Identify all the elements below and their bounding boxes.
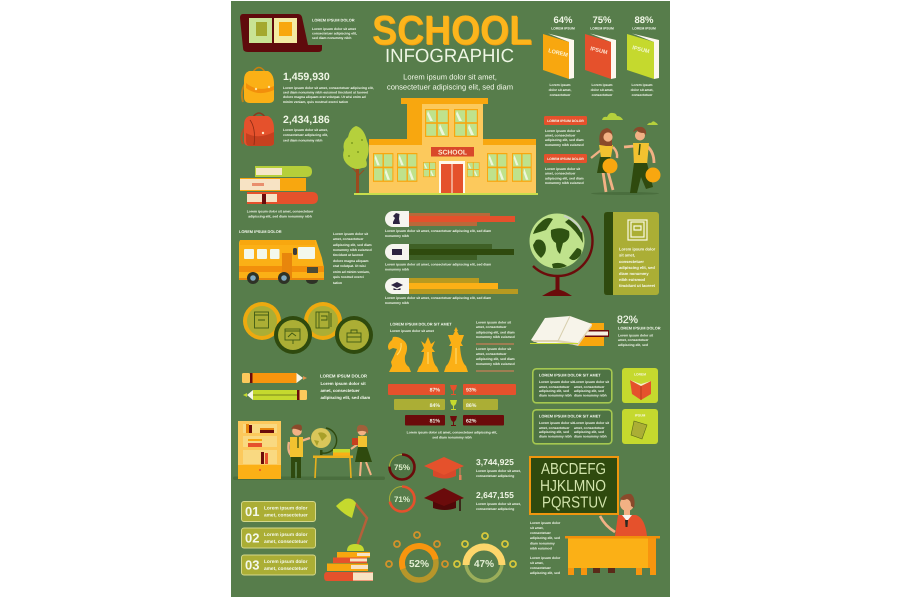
icon: orange graduation cap	[424, 457, 464, 480]
text: chess notes: nonummy nibh euismod	[476, 362, 515, 366]
chart: 71% donut: 71%	[394, 495, 410, 504]
text: teacher notes: consectetuer	[530, 566, 552, 570]
icon: orange backpack	[242, 68, 274, 103]
text: teacher notes: diam nonummy	[530, 542, 555, 546]
list: numbered items	[242, 502, 316, 575]
list item 02: amet, consectetuer	[264, 539, 308, 545]
chart: 47% donut	[454, 533, 516, 581]
title: SCHOOL	[373, 8, 533, 54]
icon: stack of books	[240, 166, 318, 204]
panel: info box one: amet, consectetuer	[539, 385, 570, 389]
text: teacher notes: consectetuer	[530, 531, 552, 535]
callout: red labels and text: LOREM IPSUM DOLOR	[547, 119, 584, 123]
icon: pencils	[242, 373, 307, 400]
list item 01: 01	[245, 504, 259, 519]
text: teacher notes: nibh euismod	[530, 546, 552, 550]
subtitle: Lorem ipsum dolor sit amet,	[403, 72, 497, 82]
subtitle: consectetuer adipiscing elit, sed diam	[387, 82, 513, 92]
stat: 88% book: 88%	[634, 15, 654, 26]
chart: 71% donut	[390, 486, 414, 512]
text: bus description: Lorem ipsum dolor sit	[333, 232, 369, 236]
stat: 88% book: consectetuer	[632, 93, 653, 97]
bar row: graduation cap: Lorem ipsum dolor sit amet, consectetuer adipiscing elit, sed diam	[385, 296, 491, 300]
stat: 2,434,186: Lorem ipsum dolor sit amet,	[283, 128, 328, 132]
text: bus description: dolore magna aliquam	[333, 259, 369, 263]
text: bus description: tation	[333, 281, 342, 285]
table with books	[313, 449, 353, 478]
text: teacher notes: adipiscing elit, sed	[530, 571, 560, 575]
text: teacher notes: Lorem ipsum dolor	[530, 556, 561, 560]
text: teacher notes: adipiscing elit, sed	[530, 536, 560, 540]
text: pencils caption: LOREM IPSUM DOLOR	[320, 374, 368, 378]
list item 03: 03	[245, 558, 259, 572]
icon: dark graduation cap	[424, 488, 464, 511]
list item 03	[242, 555, 316, 575]
text: chess notes	[476, 320, 515, 372]
stat: 1,459,930: 1,459,930	[283, 71, 330, 83]
chart: trophy comparison bars: Lorem ipsum dolor sit amet, consectetuer adipiscing elit,	[407, 430, 497, 434]
panel: info box one: diam nonummy nibh	[574, 394, 607, 398]
stat: 82%: amet, consectetuer	[618, 338, 649, 342]
stat: 75% book: Lorem ipsum	[592, 83, 613, 87]
bar row: knight	[385, 211, 515, 238]
text: chess notes: Lorem ipsum dolor sit	[476, 320, 512, 324]
list item 01: amet, consectetuer	[264, 512, 308, 518]
card: lorem with red book: LOREM	[634, 372, 646, 376]
panel: info box one: adipiscing elit, sed	[539, 389, 569, 393]
callout: red labels and text: LOREM IPSUM DOLOR	[547, 157, 584, 161]
stat: 75% book: consectetuer	[592, 93, 613, 97]
stat: 75% book: IPSUM	[590, 46, 608, 56]
stat: 75% book: 75%	[592, 15, 612, 26]
title: SCHOOL	[372, 7, 532, 53]
bar row: book	[385, 244, 514, 272]
callout: red labels and text: amet, consectetuer	[545, 134, 576, 138]
illustration: blackboard: ABCDEFG	[541, 461, 606, 478]
icons: circle badges	[243, 302, 373, 354]
bar row: knight: nonummy nibh	[385, 234, 409, 238]
chart: trophy comparison bars: 86%	[466, 403, 477, 409]
bar row: book: nonummy nibh	[385, 268, 409, 272]
panel: info box one	[533, 369, 612, 403]
stat: 82%: 82%	[617, 314, 638, 326]
text: chess notes: nonummy nibh euismod	[476, 335, 515, 339]
heading: bus: LOREM IPSUM DOLOR	[239, 229, 282, 234]
list item 01: Lorem ipsum dolor	[264, 506, 308, 512]
stat: 82%	[617, 314, 661, 347]
stat: 3,744,925: consectetuer adipiscing	[476, 474, 514, 478]
text: books caption: Lorem ipsum dolor sit amet, consectetuer	[247, 210, 314, 214]
panel: info box one: LOREM IPSUM DOLOR SIT AMET	[539, 372, 601, 378]
panel: info box two: amet, consectetuer	[574, 426, 605, 430]
illustration: blackboard: PQRSTUV	[542, 494, 607, 512]
text: bus description: adipiscing elit, sed diam	[333, 243, 372, 247]
text: laptop caption: LOREM IPSUM DOLOR	[312, 18, 355, 22]
stat: 2,434,186	[283, 114, 330, 142]
chart: trophy comparison bars: 62%	[466, 418, 477, 424]
list item 03: Lorem ipsum dolor	[264, 559, 308, 565]
list item 02: Lorem ipsum dolor	[264, 532, 308, 538]
callout: red labels and text	[544, 116, 587, 185]
text: laptop caption: sed diam nonummy nibh	[312, 36, 351, 40]
card: ipsum with notes	[622, 409, 658, 444]
chart: 75% donut	[390, 454, 414, 480]
text: bus description	[333, 232, 372, 285]
text: teacher notes: sit amet,	[530, 526, 544, 530]
text: laptop caption: Lorem ipsum dolor sit amet	[312, 27, 357, 31]
text: bus description: tincidunt ut laoreet	[333, 253, 364, 257]
illustration: teacher at desk	[565, 494, 660, 575]
icon: tree	[343, 126, 369, 193]
stat: 75% book	[585, 15, 616, 97]
text: pencils caption: Lorem ipsum dolor sit	[320, 381, 366, 386]
callout: red labels and text: Lorem ipsum dolor sit	[545, 167, 581, 171]
stat: 2,434,186: consectetuer adipiscing elit,	[283, 133, 328, 137]
panel: info box two: adipiscing elit, sed	[539, 430, 569, 434]
bar row: knight: Lorem ipsum dolor sit amet, consectetuer adipiscing elit, sed diam	[385, 229, 491, 233]
stat: 82%: Lorem ipsum dolor sit	[618, 334, 654, 338]
panel: notebook card: adipiscing elit, sed	[619, 265, 655, 270]
text: laptop caption: consectetuer adipiscing elit,	[312, 32, 357, 36]
chart: trophy comparison bars: 81%	[430, 418, 440, 424]
text: teacher notes: sit amet,	[530, 561, 544, 565]
girl student	[351, 425, 372, 476]
stat: 3,744,925	[476, 457, 521, 478]
text: chess notes: adipiscing elit, sed diam	[476, 357, 515, 361]
chart: 52% donut: 52%	[409, 559, 429, 570]
panel: info box one: diam nonummy nibh	[539, 394, 572, 398]
stat: 64% book: Lorem ipsum	[550, 83, 571, 87]
list item 03: amet, consectetuer	[264, 566, 308, 572]
chart: 52% donut	[386, 532, 448, 585]
stat: 88% book: LOREM IPSUM	[632, 26, 656, 30]
text: bus description: erat volutpat. Ut wisi	[333, 264, 366, 268]
panel: notebook card: diam nonummy	[619, 271, 649, 276]
stat: 88% book: dolor sit amet,	[631, 88, 653, 92]
stat: 82%: LOREM IPSUM DOLOR	[618, 326, 661, 330]
card: ipsum with notes: IPSUM	[635, 414, 646, 418]
stat: 64% book: consectetuer	[550, 93, 571, 97]
icon: school building: SCHOOL	[438, 149, 467, 156]
icon: red backpack	[241, 113, 274, 146]
chart: 75% donut: 75%	[394, 463, 410, 472]
subtitle	[387, 72, 513, 92]
stat: 64% book: LOREM	[548, 48, 569, 59]
chart: percentage books	[543, 15, 659, 97]
illustration: blackboard	[530, 457, 618, 514]
stat: 64% book: LOREM IPSUM	[551, 26, 575, 30]
chess section heading: LOREM IPSUM DOLOR SIT AMET	[390, 322, 452, 326]
callout: red labels and text: nonummy nibh euismod	[545, 181, 584, 185]
bookshelf	[238, 421, 281, 479]
bar row: graduation cap: nonummy nibh	[385, 301, 409, 305]
icon: open book on stack	[530, 316, 609, 346]
text: chess notes: amet, consectetuer	[476, 352, 507, 356]
icon: chess pieces	[388, 327, 468, 372]
teacher and globe	[288, 424, 337, 478]
text: books caption: adipiscing elit, sed diam nonummy nibh	[248, 214, 312, 218]
callout: red labels and text: Lorem ipsum dolor sit	[545, 129, 581, 133]
card: lorem with red book	[622, 368, 658, 403]
chart: trophy comparison bars	[388, 384, 516, 440]
stat: 64% book: 64%	[553, 15, 573, 26]
boy	[624, 146, 654, 163]
stat: 1,459,930	[283, 71, 374, 104]
chart: trophy comparison bars: sed diam nonummy nibh	[432, 436, 472, 440]
panel: notebook card: consectetuer	[619, 259, 644, 264]
panel: info box two: LOREM IPSUM DOLOR SIT AMET	[539, 414, 601, 418]
stat: 1,459,930: Lorem ipsum dolor sit amet, consectetuer adipiscing elit,	[283, 86, 374, 90]
stat: 64% book	[543, 15, 575, 97]
panel: info box two: diam nonummy nibh	[574, 434, 607, 438]
chart: layered bars with icons	[385, 211, 518, 305]
panel: notebook card: nibh euismod	[619, 277, 646, 282]
callout: red labels and text: adipiscing elit, sed diam	[545, 138, 584, 142]
text: bus description: quis nostrud exerci	[333, 275, 364, 279]
girl	[591, 147, 617, 158]
icon: school building	[354, 98, 538, 195]
list item 02	[242, 528, 316, 548]
icon: notebook	[628, 220, 647, 240]
stat: 1,459,930: dolore magna aliquam erat volutpat. Ut wisi enim ad	[283, 95, 366, 99]
chart: trophy comparison bars: 93%	[466, 388, 477, 394]
stat: 75% book: LOREM IPSUM	[590, 26, 614, 30]
panel: info box two: Lorem ipsum dolor sit	[574, 421, 610, 425]
text: books caption	[247, 210, 314, 218]
stat: 2,647,155: Lorem ipsum dolor sit amet,	[476, 502, 521, 506]
stat: 75% book: dolor sit amet,	[591, 88, 613, 92]
chart: trophy comparison bars: 87%	[430, 388, 440, 394]
callout: red labels and text: nonummy nibh euismod	[545, 143, 584, 147]
stat: 64% book: dolor sit amet,	[549, 88, 571, 92]
bar row: graduation cap	[385, 278, 518, 305]
stat: 2,434,186: 2,434,186	[283, 114, 330, 126]
chart: 47% donut: 47%	[474, 559, 494, 570]
panel: info box one: adipiscing elit, sed	[574, 389, 604, 393]
panel: notebook card	[604, 212, 659, 295]
list item 02: 02	[245, 530, 259, 546]
illustration: blackboard: HJKLMNO	[540, 478, 606, 495]
panel: notebook card: sit amet,	[619, 252, 635, 258]
chart: trophy comparison bars: 84%	[430, 403, 440, 409]
text: chess notes: amet, consectetuer	[476, 325, 507, 329]
icon: laptop with books	[240, 14, 322, 52]
stat: 88% book	[627, 15, 659, 97]
callout: red labels and text: adipiscing elit, sed diam	[545, 176, 584, 180]
stat: 3,744,925: Lorem ipsum dolor sit amet,	[476, 469, 521, 473]
text: bus description: enim ad minim veniam,	[333, 270, 370, 274]
stat: 88% book: Lorem ipsum	[632, 83, 653, 87]
stat: 3,744,925: 3,744,925	[476, 457, 514, 467]
icon: desk lamp on books	[324, 498, 373, 581]
stat: 88% book: IPSUM	[632, 45, 650, 55]
background panel	[231, 1, 670, 597]
text: bus description: nonummy nibh euismod	[333, 248, 372, 252]
text: pencils caption	[320, 374, 370, 400]
illustration: students with bags	[591, 113, 660, 195]
chess section heading	[390, 322, 452, 333]
stat: 2,647,155: 2,647,155	[476, 490, 514, 500]
panel: info box two: Lorem ipsum dolor sit	[539, 421, 575, 425]
panel: info box one: Lorem ipsum dolor sit	[574, 380, 610, 384]
text: laptop caption	[312, 18, 357, 40]
text: bus description: amet, consectetuer	[333, 237, 364, 241]
panel: info box two	[533, 410, 612, 444]
stat: 1,459,930: sed diam nonummy nibh euismod tincidunt ut laoreet	[283, 90, 369, 94]
title: INFOGRAPHIC	[385, 46, 514, 67]
stat: 2,434,186: sed diam nonummy nibh	[283, 138, 322, 142]
panel: info box two: adipiscing elit, sed	[574, 430, 604, 434]
stat: 2,647,155	[476, 490, 521, 511]
panel: info box two: diam nonummy nibh	[539, 434, 572, 438]
illustration: classroom scene	[233, 421, 385, 480]
icon: school bus	[239, 240, 324, 284]
chess section heading: Lorem ipsum dolor sit amet	[390, 329, 435, 333]
text: chess notes: adipiscing elit, sed diam	[476, 330, 515, 334]
bar row: book: Lorem ipsum dolor sit amet, consectetuer adipiscing elit, sed diam	[385, 262, 491, 266]
panel: notebook card: Lorem ipsum dolor	[619, 246, 656, 252]
text: pencils caption: adipiscing elit, sed diam	[320, 395, 370, 400]
icon: globe	[530, 214, 593, 296]
stat: 1,459,930: minim veniam, quis nostrud exerci tation	[283, 100, 348, 104]
icon: trophies	[450, 385, 457, 426]
stat: 82%: adipiscing elit, sed	[618, 343, 648, 347]
panel: info box two: amet, consectetuer	[539, 426, 570, 430]
text: teacher notes	[530, 521, 561, 575]
text: pencils caption: amet, consectetuer	[320, 388, 360, 393]
panel: info box one: Lorem ipsum dolor sit	[539, 380, 575, 384]
callout: red labels and text: amet, consectetuer	[545, 172, 576, 176]
text: chess notes: Lorem ipsum dolor sit	[476, 347, 512, 351]
text: teacher notes: Lorem ipsum dolor	[530, 521, 561, 525]
list item 01	[242, 502, 316, 522]
panel: info box one: amet, consectetuer	[574, 385, 605, 389]
stat: 2,647,155: consectetuer adipiscing	[476, 507, 514, 511]
panel: notebook card: tincidunt ut laoreet	[619, 283, 656, 288]
